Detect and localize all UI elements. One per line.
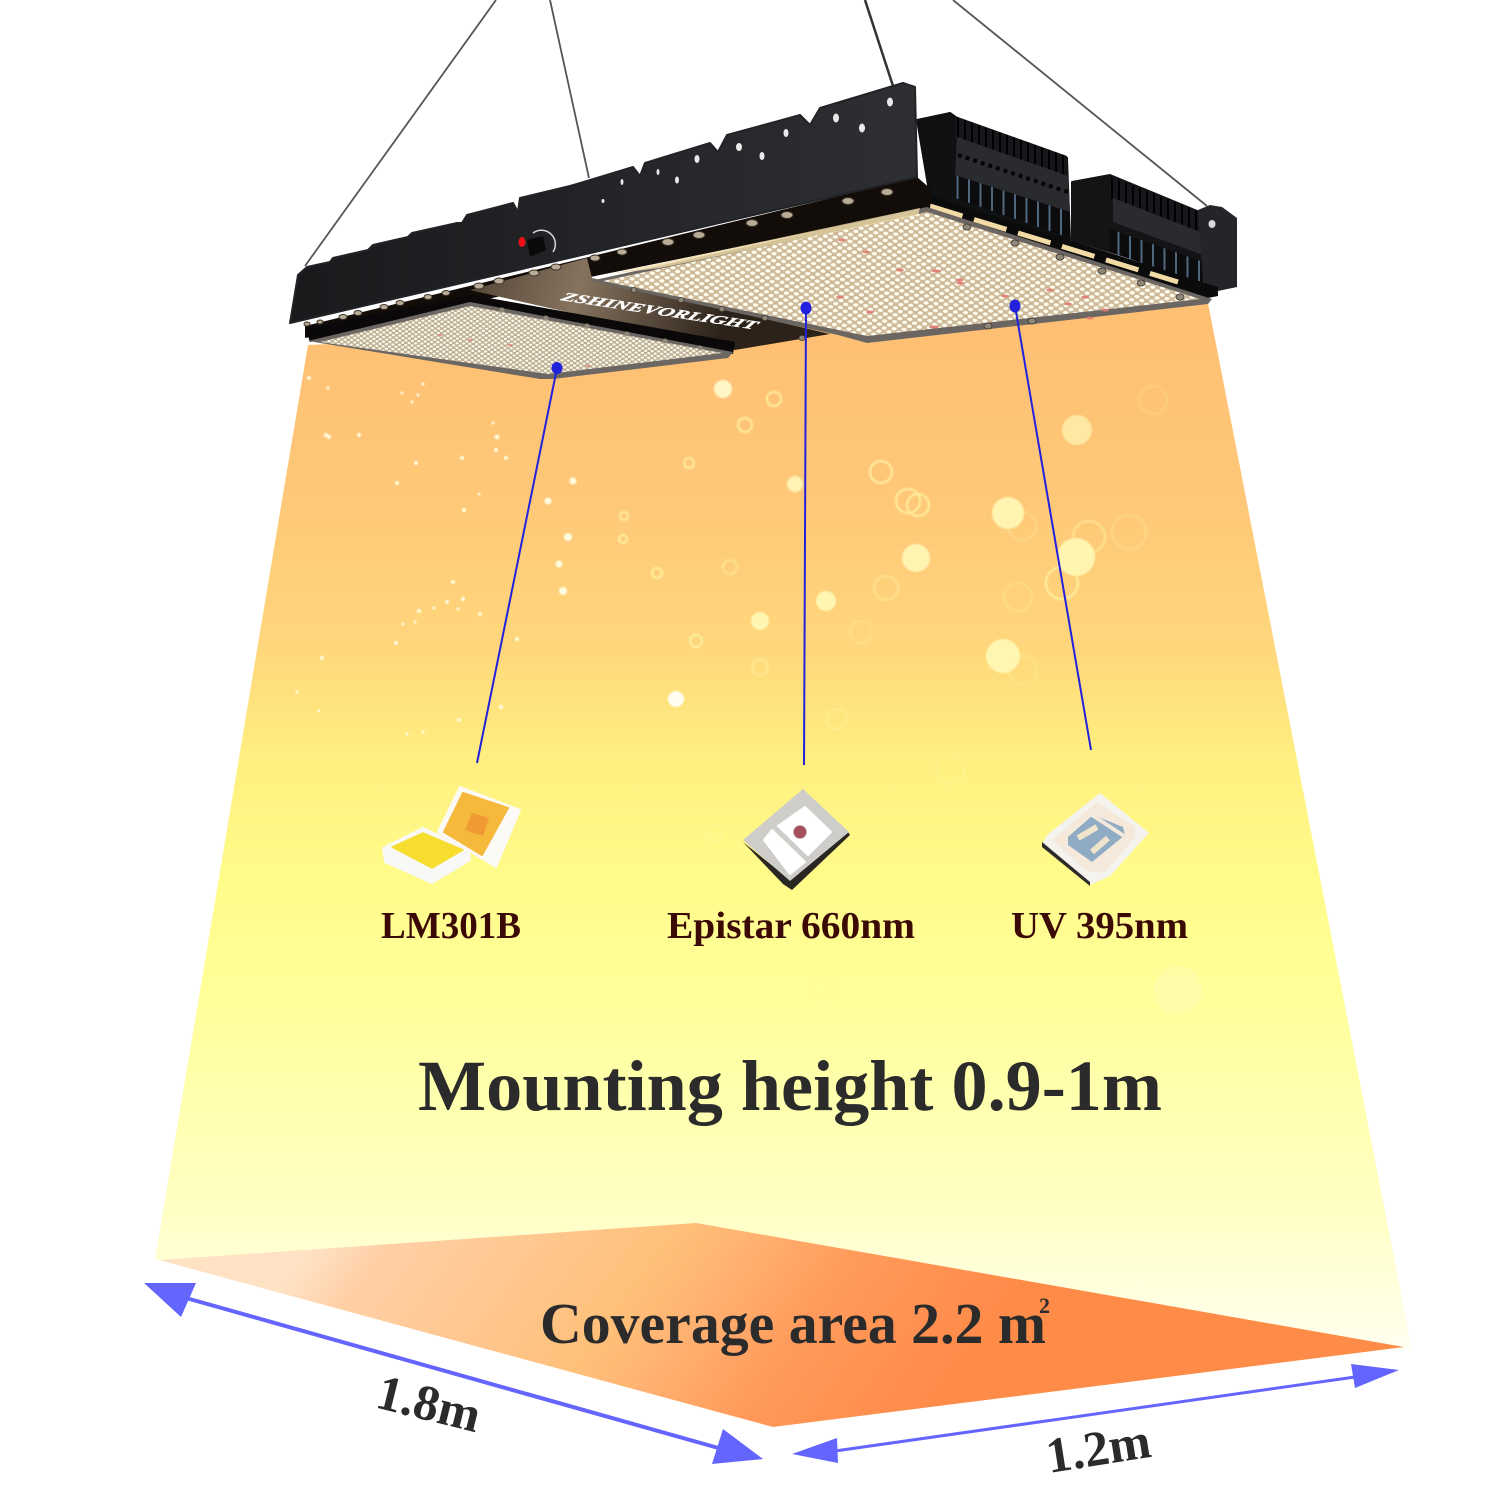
edge screws — [631, 224, 1184, 340]
bar screws — [304, 188, 893, 326]
right LED panel — [590, 207, 1212, 343]
side rail — [925, 195, 1218, 298]
dimmer knob — [518, 230, 555, 257]
icon: UV 395nm chip — [1042, 793, 1149, 886]
chip label: Epistar 660nm: Epistar 660nm — [667, 905, 915, 947]
label: 1.2m: 1.2m — [1042, 1412, 1154, 1484]
light bokeh particles — [296, 376, 1202, 1014]
centre plate with brand — [470, 258, 830, 350]
main mounting bar — [290, 83, 917, 323]
arrow: 1.2m dimension — [792, 1364, 1399, 1463]
left LED panel — [308, 302, 733, 379]
label: 1.8m: 1.8m — [371, 1363, 487, 1443]
heading: mounting height: Mounting height 0.9-1m — [418, 1046, 1162, 1126]
superscript 2: 2 — [1039, 1293, 1050, 1318]
chip label: UV 395nm: UV 395nm — [1011, 905, 1188, 947]
heatsink: front block — [917, 113, 1070, 240]
underside strip — [305, 177, 932, 338]
chip label: LM301B: LM301B — [381, 905, 521, 947]
coverage floor area — [159, 1223, 1404, 1427]
mounting holes — [602, 98, 893, 203]
light beam — [155, 303, 1412, 1350]
icon: Epistar 660nm chip — [743, 789, 850, 890]
heading: coverage area: Coverage area 2.2 m — [540, 1291, 1046, 1356]
left rail — [305, 295, 735, 354]
red diode scatter — [836, 238, 1109, 328]
hanging wires — [305, 0, 1207, 266]
centre plate with brand: ZSHINEVORLIGHT — [557, 290, 763, 332]
leader lines to LED chips — [477, 300, 1091, 765]
LED grow light fixture — [290, 83, 1237, 379]
arrow: 1.8m dimension — [144, 1283, 763, 1464]
heatsink: rear block with end cap — [1072, 175, 1237, 291]
icon: LM301B chips — [383, 787, 520, 883]
